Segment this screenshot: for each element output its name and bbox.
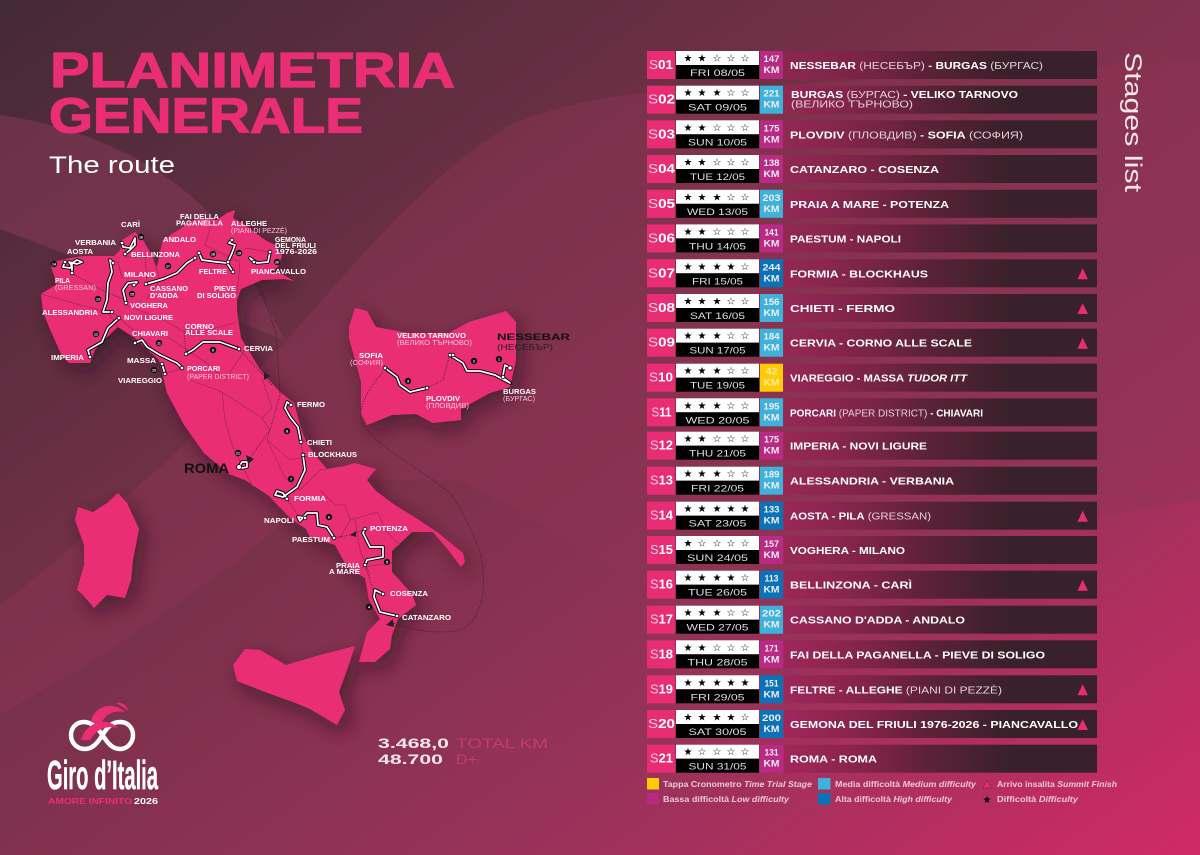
stage S07: FRI 15/05	[692, 276, 743, 286]
stage S13: KM	[764, 481, 780, 491]
stage S18: KM	[764, 654, 780, 664]
map: Bulgaria	[349, 308, 516, 425]
totals	[378, 735, 548, 767]
stage S13: FRI 22/05	[691, 484, 744, 494]
map: city labels: SOFIA	[359, 351, 384, 360]
stage S19: 151	[764, 678, 778, 688]
stage S05: WED 13/05	[687, 207, 748, 217]
map: stage number badges: 11	[157, 341, 161, 345]
stage S02: S02	[648, 93, 675, 107]
map: city labels: (ВЕЛИКО ТЪРНОВО)	[397, 338, 472, 347]
stage S02: (ВЕЛИКО ТЪРНОВО)	[791, 100, 913, 111]
map: regional borders	[41, 222, 400, 575]
stage S16	[647, 571, 1097, 599]
map: city labels: POTENZA	[370, 524, 409, 533]
logo: Giro d'Italia: AMORE INFINITO	[48, 796, 132, 806]
stage S15: VOGHERA - MILANO	[790, 546, 905, 557]
map: city labels: (СОФИЯ)	[350, 358, 383, 367]
map: city labels: ANDALO	[163, 235, 196, 244]
stage S10: KM	[764, 378, 780, 388]
stage S06	[647, 224, 1097, 252]
map: city labels: CARÌ	[121, 220, 140, 229]
stage S04: ★★☆☆☆	[684, 158, 750, 168]
map: stage number badges: 1	[498, 357, 500, 361]
stage S07	[647, 259, 1097, 287]
stage S21: ★☆☆☆☆	[684, 747, 750, 758]
stage S13: ALESSANDRIA - VERBANIA	[790, 477, 955, 488]
totals: TOTAL KM	[456, 735, 548, 751]
stage S13: 189	[764, 470, 780, 480]
stage S18: S18	[650, 647, 673, 661]
map: city labels: NESSEBAR	[497, 332, 570, 343]
stage S18	[647, 640, 1097, 668]
map: stage number badges: 16	[139, 235, 143, 239]
map: city labels: DI SOLIGO	[197, 291, 236, 300]
map: city labels: PRAIA	[336, 561, 361, 570]
map: stage number badges: 5	[386, 560, 388, 564]
stage S12: KM	[764, 446, 780, 456]
stage S06: THU 14/05	[689, 241, 746, 251]
stage S11: S11	[652, 405, 672, 419]
stage S06: KM	[764, 238, 780, 248]
stage S19: S19	[650, 682, 673, 696]
stage S02: 221	[764, 89, 780, 99]
stage S18: 171	[764, 643, 778, 653]
map: city labels: DEL FRIULI	[275, 241, 316, 250]
map: city labels: D'ADDA	[150, 291, 179, 300]
stage S01: FRI 08/05	[690, 68, 745, 78]
stage S21: 131	[764, 748, 778, 758]
stage S03: ★★☆☆☆	[684, 123, 750, 134]
stage S04: CATANZARO - COSENZA	[790, 165, 940, 176]
stage S15	[647, 536, 1097, 564]
heading: stages list: Stages list	[1119, 52, 1146, 192]
stage S12: S12	[650, 439, 673, 453]
legend: Tappa Cronometro Time Trial Stage	[663, 780, 812, 789]
stage S17: 202	[762, 609, 781, 619]
logo: Giro d'Italia	[47, 703, 159, 806]
stage S17	[647, 606, 1097, 634]
stage S16: 113	[764, 574, 778, 584]
stage S11: ★★★☆☆	[684, 401, 750, 412]
map: stage number badges	[51, 234, 502, 610]
stage S10: S10	[649, 371, 673, 385]
map: transfer arrowheads	[246, 372, 394, 627]
stage S17: ★★★☆☆	[684, 608, 750, 619]
map: city labels: A MARE	[329, 567, 360, 576]
totals: 48.700	[378, 751, 443, 767]
map: city labels: ALLE SCALE	[185, 328, 233, 337]
stage S15: KM	[764, 550, 780, 560]
stage S01: ★★☆☆☆	[684, 54, 750, 64]
stage S13	[647, 467, 1097, 495]
stage S12: ★★☆☆☆	[684, 434, 750, 445]
stage S05: PRAIA A MARE - POTENZA	[790, 200, 950, 211]
map: city labels: BURGAS	[503, 387, 536, 396]
stage S21	[647, 745, 1097, 773]
stage S06: ★★☆☆☆	[684, 227, 750, 238]
stage S20	[647, 710, 1097, 738]
stage S07: S07	[648, 266, 675, 280]
stage S20: SAT 30/05	[688, 727, 746, 737]
stage S05	[647, 190, 1097, 218]
stage S04: S04	[648, 162, 675, 176]
stage S06: 141	[764, 227, 778, 237]
stage S15: 157	[764, 539, 779, 549]
stage S14: S14	[650, 509, 673, 523]
stage S16: TUE 26/05	[688, 588, 747, 598]
stage S14: 133	[764, 505, 780, 515]
stage S10	[647, 364, 1097, 392]
stage S10: VIAREGGIO - MASSA TUDOR ITT	[790, 374, 968, 385]
subtitle: The route	[49, 152, 175, 179]
stage S04: KM	[764, 169, 780, 179]
map: stage number badges: 17	[166, 264, 170, 268]
stage S07: KM	[764, 273, 780, 283]
stage S16: KM	[764, 585, 780, 595]
map: city labels: PLOVDIV	[426, 394, 460, 403]
stage S21: ROMA - ROMA	[790, 755, 878, 766]
stage S12: 175	[764, 435, 779, 445]
map: city labels: CHIAVARI	[132, 329, 168, 338]
map: city labels: BLOCKHAUS	[308, 450, 357, 459]
stage S01: KM	[764, 65, 780, 75]
map: city labels: (PAPER DISTRICT)	[187, 372, 249, 381]
stage S19: ★★★★★	[684, 678, 750, 689]
stage S20: KM	[764, 724, 780, 734]
stage S04: TUE 12/05	[690, 172, 745, 182]
map: city labels: VIAREGGIO	[118, 376, 162, 385]
title: GENERALE	[49, 90, 363, 144]
stage S14: AOSTA - PILA (GRESSAN)	[790, 512, 931, 523]
stage S14: KM	[764, 516, 780, 526]
stage S12	[647, 432, 1097, 460]
legend: ★	[983, 795, 992, 806]
stage S02: BURGAS (БУРГАС) - VELIKO TARNOVO	[791, 90, 1018, 101]
map: route lines	[63, 238, 510, 616]
stage S20: S20	[648, 717, 675, 731]
map: stage number badges: 2	[473, 359, 475, 363]
stage S16: ★★★★☆	[684, 573, 750, 584]
text: Giro d’Italia	[47, 752, 159, 798]
map: city labels: VERBANIA	[75, 238, 117, 247]
map: stage number badges: 12	[94, 332, 98, 336]
stage S21: SUN 31/05	[688, 762, 746, 772]
stage S01: NESSEBAR (НЕСЕБЪР) - BURGAS (БУРГАС)	[790, 61, 1043, 72]
map: city labels: PAESTUM	[292, 535, 330, 544]
stage S15: SUN 24/05	[687, 553, 748, 563]
stage S09: CERVIA - CORNO ALLE SCALE	[790, 339, 972, 350]
map: city labels: CERVIA	[244, 344, 274, 353]
map: city labels: AOSTA	[67, 247, 94, 256]
map: city labels: FORMIA	[294, 494, 327, 503]
stage S17: CASSANO D'ADDA - ANDALO	[790, 616, 965, 627]
map: start and finish markers	[63, 238, 512, 618]
map: city labels: PIEVE	[214, 284, 236, 293]
map: city labels: ROMA	[184, 461, 229, 476]
stage S05: KM	[764, 204, 780, 214]
map: stage number badges: 7	[290, 477, 292, 481]
stage S12: IMPERIA - NOVI LIGURE	[790, 442, 927, 453]
map: city labels: 1976-2026	[275, 247, 317, 256]
stage S01: S01	[649, 58, 673, 72]
stage S08: KM	[764, 308, 780, 318]
stage S06: PAESTUM - NAPOLI	[790, 234, 901, 245]
stage S17: WED 27/05	[686, 623, 748, 633]
map: city labels: MILANO	[124, 270, 156, 279]
stage S09: 184	[764, 332, 780, 342]
map: city labels: FERMO	[297, 400, 325, 409]
stage S07: ★★★★☆	[684, 262, 750, 273]
logo: Giro d'Italia: 2026	[134, 796, 158, 806]
map: city labels: PILA	[55, 276, 71, 285]
stage S13: ★★★☆☆	[684, 469, 750, 480]
stage S10: TUE 19/05	[690, 381, 745, 391]
stage S10: ★★★☆☆	[684, 366, 750, 377]
stage S04: 138	[764, 158, 780, 168]
stage S18: ★★☆☆☆	[684, 643, 750, 654]
stage S20: ★★★★☆	[684, 712, 750, 724]
map: city labels: VOGHERA	[130, 301, 169, 310]
stage S01	[647, 51, 1097, 79]
map: city labels	[42, 212, 570, 622]
stage S05: ★★★☆☆	[684, 192, 750, 203]
title: PLANIMETRIA	[50, 44, 455, 98]
stage S12: THU 21/05	[689, 449, 746, 459]
map: Italy and islands	[41, 210, 465, 725]
map: city labels: (ПЛОВДИВ)	[426, 401, 469, 410]
map: stage number badges: 18	[211, 252, 215, 256]
legend: Alta difficoltà High difficulty	[835, 795, 952, 804]
stage S09: ★★★☆☆	[684, 331, 750, 342]
map: stage number badges: 14	[52, 262, 56, 266]
stage S14: SAT 23/05	[688, 519, 746, 529]
stage S14: ★★★★★	[684, 504, 750, 515]
map: city labels: CATANZARO	[402, 613, 451, 622]
stage S08: CHIETI - FERMO	[790, 304, 895, 315]
map: transfer dotted lines	[72, 248, 484, 632]
stage S18: FAI DELLA PAGANELLA - PIEVE DI SOLIGO	[790, 650, 1045, 661]
map: stage number badges: 8	[286, 429, 288, 433]
map: stage number badges: 9	[212, 348, 214, 352]
stage S16: BELLINZONA - CARÌ	[790, 579, 912, 592]
stage S19: KM	[764, 689, 780, 699]
stage S11: PORCARI (PAPER DISTRICT) - CHIAVARI	[790, 408, 983, 419]
stage S13: S13	[650, 474, 673, 488]
stage S11: KM	[764, 412, 780, 422]
stage S09	[647, 329, 1097, 357]
map: stage number badges: 21	[236, 451, 240, 455]
map: city labels: (PIANI DI PEZZÈ)	[231, 226, 287, 235]
map: city labels: CORNO	[185, 322, 214, 331]
map: city labels: GEMONA	[275, 235, 307, 244]
stage S21: KM	[764, 759, 780, 769]
stage S20: GEMONA DEL FRIULI 1976-2026 - PIANCAVALLO	[790, 720, 1078, 731]
map: stage number badges: 19	[237, 251, 241, 255]
stage S19	[647, 675, 1097, 703]
stage S03: SUN 10/05	[688, 137, 747, 147]
stage S11: WED 20/05	[686, 415, 750, 425]
map: city labels: (НЕСЕБЪР)	[497, 343, 553, 352]
map: city labels: CASSANO	[150, 284, 188, 293]
map: stage number badges: 3	[407, 379, 409, 383]
stage S03: S03	[648, 127, 675, 141]
legend: Difficoltà Difficulty	[997, 795, 1078, 804]
map: city labels: VELIKO TARNOVO	[397, 331, 466, 340]
stage S02: SAT 09/05	[688, 103, 747, 113]
map: city labels: PIANCAVALLO	[251, 267, 306, 276]
stage S08: 156	[764, 297, 780, 307]
map: city labels: CHIETI	[307, 438, 332, 447]
map: stage number badges: 6	[328, 515, 330, 519]
map: city labels: IMPERIA	[51, 353, 85, 362]
stage S14	[647, 502, 1097, 530]
stage S04	[647, 155, 1097, 183]
stage S15: S15	[650, 543, 673, 557]
stage S09: S09	[648, 336, 675, 350]
stage S09: SUN 17/05	[690, 346, 746, 356]
stage S09: KM	[764, 343, 780, 353]
legend: Bassa difficoltà Low difficulty	[663, 795, 789, 804]
stage S03: 175	[764, 123, 780, 133]
map: city labels: (БУРГАС)	[503, 394, 535, 403]
stage S18: THU 28/05	[688, 657, 748, 667]
stage S15: ★☆☆☆☆	[684, 538, 750, 550]
map: city labels: FAI DELLA	[180, 212, 220, 221]
map: city labels: ALESSANDRIA	[42, 308, 99, 317]
map: city labels: PAGANELLA	[176, 218, 224, 228]
map: stage number badges: 15	[130, 292, 134, 296]
map: stage number badges: 20	[275, 260, 279, 264]
map: city labels: PORCARI	[187, 364, 220, 373]
map: city labels: NOVI LIGURE	[124, 313, 173, 322]
stage S05: S05	[648, 197, 675, 211]
legend	[647, 778, 1117, 806]
stage S02: KM	[764, 100, 780, 110]
totals: D+	[456, 751, 477, 767]
stage S20: 200	[762, 713, 781, 723]
totals: 3.468,0	[378, 735, 449, 751]
map: stage number badges: 10	[152, 368, 156, 372]
stage S08	[647, 294, 1097, 322]
stage S08: S08	[648, 301, 675, 315]
stage S19: FRI 29/05	[690, 692, 744, 702]
title	[49, 44, 455, 144]
stage S08: SAT 16/05	[690, 311, 745, 321]
map: stage number badges: 13	[96, 297, 100, 301]
stage S01: 147	[764, 54, 780, 64]
stage S07: 244	[762, 262, 780, 272]
stage S17: KM	[764, 620, 780, 630]
stage S03	[647, 120, 1097, 148]
stage S10: 42	[766, 367, 778, 377]
stage S08: ★★★☆☆	[684, 296, 750, 308]
stage S03: KM	[764, 134, 780, 144]
map: city labels: COSENZA	[390, 589, 429, 598]
stage S06: S06	[648, 231, 675, 245]
map: city labels: NAPOLI	[264, 516, 294, 525]
stage S11: 195	[764, 401, 780, 411]
stage S11	[647, 398, 1097, 426]
stage S03: PLOVDIV (ПЛОВДИВ) - SOFIA (СОФИЯ)	[790, 130, 1023, 141]
stage S02	[647, 86, 1097, 114]
map: city labels: (GRESSAN)	[55, 283, 96, 292]
map: stage number badges: 4	[368, 605, 370, 609]
stage S02: ★★★☆☆	[684, 88, 750, 99]
map: city labels: MASSA	[127, 356, 157, 365]
map: city labels: ALLEGHE	[231, 219, 267, 228]
stage S17: S17	[650, 613, 673, 627]
legend: Arrivo insalita Summit Finish	[997, 780, 1117, 789]
stage S21: S21	[650, 752, 673, 766]
stage S19: FELTRE - ALLEGHE (PIANI DI PEZZÈ)	[790, 683, 1002, 696]
stage S07: FORMIA - BLOCKHAUS	[790, 269, 928, 280]
map: city labels: FELTRE	[199, 267, 227, 276]
stage S16: S16	[650, 578, 673, 592]
legend: Media difficoltà Medium difficulty	[835, 780, 976, 789]
map: city labels: BELLINZONA	[131, 250, 181, 259]
stage S05: 203	[762, 193, 780, 203]
